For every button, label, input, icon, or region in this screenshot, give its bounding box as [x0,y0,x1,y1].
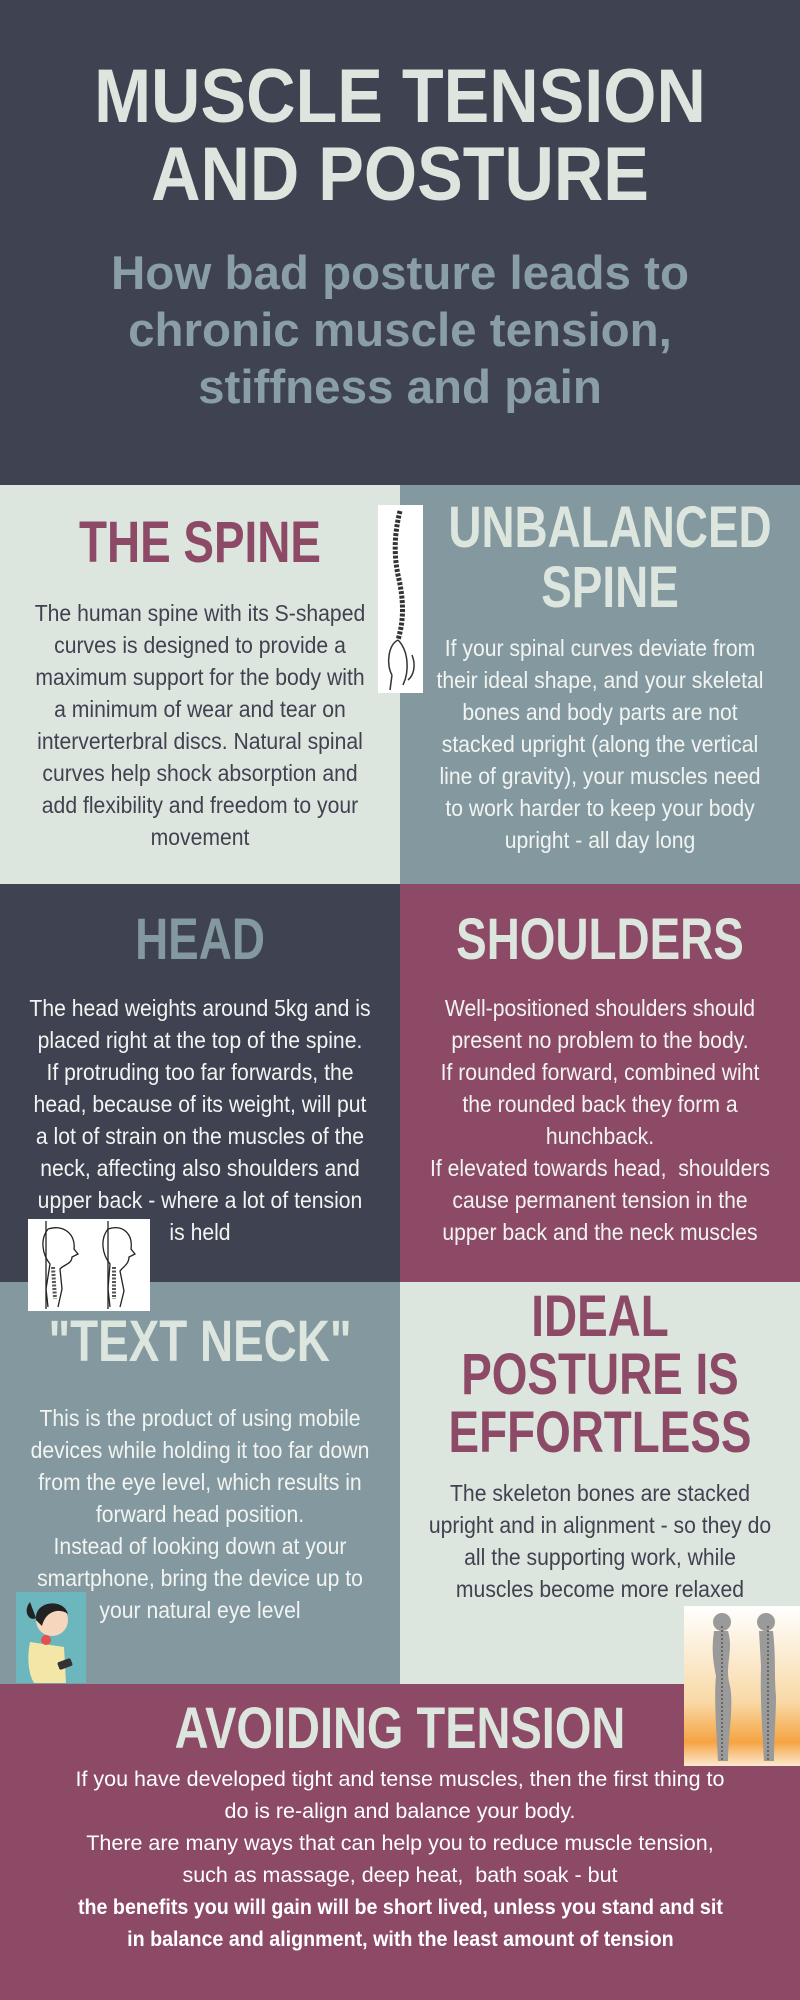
text: shoulders: cause permanent tension in the [452,1187,748,1213]
panel: head [0,884,400,1282]
heading: unbalanced spine [448,495,772,620]
text: head: neck, affecting also shoulders and [40,1155,360,1181]
text: shoulders: present no problem to the body. [451,1027,749,1053]
text: unbalanced: bones and body parts are not [462,699,738,725]
text: spine: curves help shock absorption and [42,760,358,786]
heading: shoulders: SHOULDERS [456,907,744,972]
text: avoiding tension: do is re-align and balance your body. [224,1799,576,1823]
title: MUSCLE TENSION [94,54,706,139]
heading: head: HEAD [135,907,265,972]
text: text neck: This is the product of using mobile [39,1405,361,1431]
text: shoulders: the rounded back they form a [462,1091,738,1117]
text: spine: interverterbral discs. Natural spinal [37,728,363,754]
text: head [29,995,371,1245]
text: avoiding tension: There are many ways that can help you to reduce muscle tension, [86,1831,714,1855]
heading: avoiding tension: AVOIDING TENSION [175,1696,625,1761]
title [94,54,706,217]
heading: ideal posture: POSTURE IS [461,1342,739,1407]
panel: shoulders [400,884,800,1282]
text: text neck: your natural eye level [99,1597,301,1623]
text: unbalanced: If your spinal curves deviate from [445,635,755,661]
text: spine [35,600,365,850]
text: ideal posture: muscles become more relaxed [456,1576,744,1602]
text: head: head, because of its weight, will put [34,1091,366,1117]
icon: head posture [28,1219,150,1311]
bottom panel: avoiding tension [0,1684,800,2000]
text: unbalanced: line of gravity), your muscles need [439,763,761,789]
text: head: is held [169,1219,231,1245]
heading: ideal posture: EFFORTLESS [449,1400,751,1465]
text: spine: movement [151,824,249,850]
icon: girl with phone [16,1592,86,1683]
text: spine: curves is designed to provide a [54,632,346,658]
text: shoulders: Well-positioned shoulders should [445,995,755,1021]
subtitle: stiffness and pain [198,361,602,414]
text: spine: add flexibility and freedom to your [42,792,358,818]
text: shoulders: hunchback. [546,1123,654,1149]
text: head: upper back - where a lot of tension [38,1187,362,1213]
text: shoulders: If rounded forward, combined wiht [441,1059,759,1085]
heading: ideal posture: IDEAL [531,1284,669,1349]
panel: text neck [0,1282,400,1684]
text: spine: maximum support for the body with [35,664,365,690]
text: shoulders: If elevated towards head, shoulders [430,1155,770,1181]
text: unbalanced: stacked upright (along the vertical [442,731,758,757]
text: spine: The human spine with its S-shaped [35,600,365,626]
text: unbalanced: their ideal shape, and your skeletal [436,667,764,693]
text: head: placed right at the top of the spine. [38,1027,362,1053]
heading: ideal posture [449,1284,751,1465]
text: shoulders: upper back and the neck muscles [442,1219,758,1245]
text: avoiding tension [76,1767,724,1951]
heading: text neck: "TEXT NECK" [48,1309,352,1374]
subtitle: How bad posture leads to [111,247,689,300]
title: AND POSTURE [151,132,649,217]
text: ideal posture: all the supporting work, while [464,1544,736,1570]
text: unbalanced: upright - all day long [505,827,695,853]
text: shoulders [430,995,770,1245]
icon: spine [378,505,423,693]
text: avoiding tension: in balance and alignment, with the least amount of tension [127,1927,673,1951]
text: head: If protruding too far forwards, the [47,1059,353,1085]
icon: posture figures [684,1606,800,1766]
heading: unbalanced spine: UNBALANCED [448,495,772,560]
text: avoiding tension: the benefits you will gain will be short lived, unless you stand and sit [78,1895,722,1919]
panel: ideal posture [400,1282,800,1684]
text: unbalanced: to work harder to keep your body [445,795,755,821]
text: head: a lot of strain on the muscles of the [36,1123,364,1149]
text: text neck: forward head position. [96,1501,304,1527]
text: ideal posture: upright and in alignment - so they do [429,1512,771,1538]
text: text neck: smartphone, bring the device up to [37,1565,363,1591]
text: text neck: from the eye level, which results in [38,1469,362,1495]
text: avoiding tension: If you have developed tight and tense muscles, then the first thing to [76,1767,724,1791]
text: head: The head weights around 5kg and is [29,995,371,1021]
text: spine: a minimum of wear and tear on [54,696,346,722]
subtitle [111,247,689,414]
text: ideal posture: The skeleton bones are stacked [450,1480,750,1506]
text: text neck: devices while holding it too far down [31,1437,369,1463]
panel: the spine [0,485,400,884]
subtitle: chronic muscle tension, [128,304,672,357]
text: avoiding tension: such as massage, deep heat, bath soak - but [182,1863,618,1887]
header panel [0,0,800,485]
heading: unbalanced spine: SPINE [541,555,679,620]
text: text neck: Instead of looking down at your [54,1533,346,1559]
panel: unbalanced spine [400,485,800,884]
text: text neck [31,1405,369,1623]
text: unbalanced [436,635,764,853]
heading: the spine: THE SPINE [79,510,321,575]
text: ideal posture [429,1480,771,1602]
